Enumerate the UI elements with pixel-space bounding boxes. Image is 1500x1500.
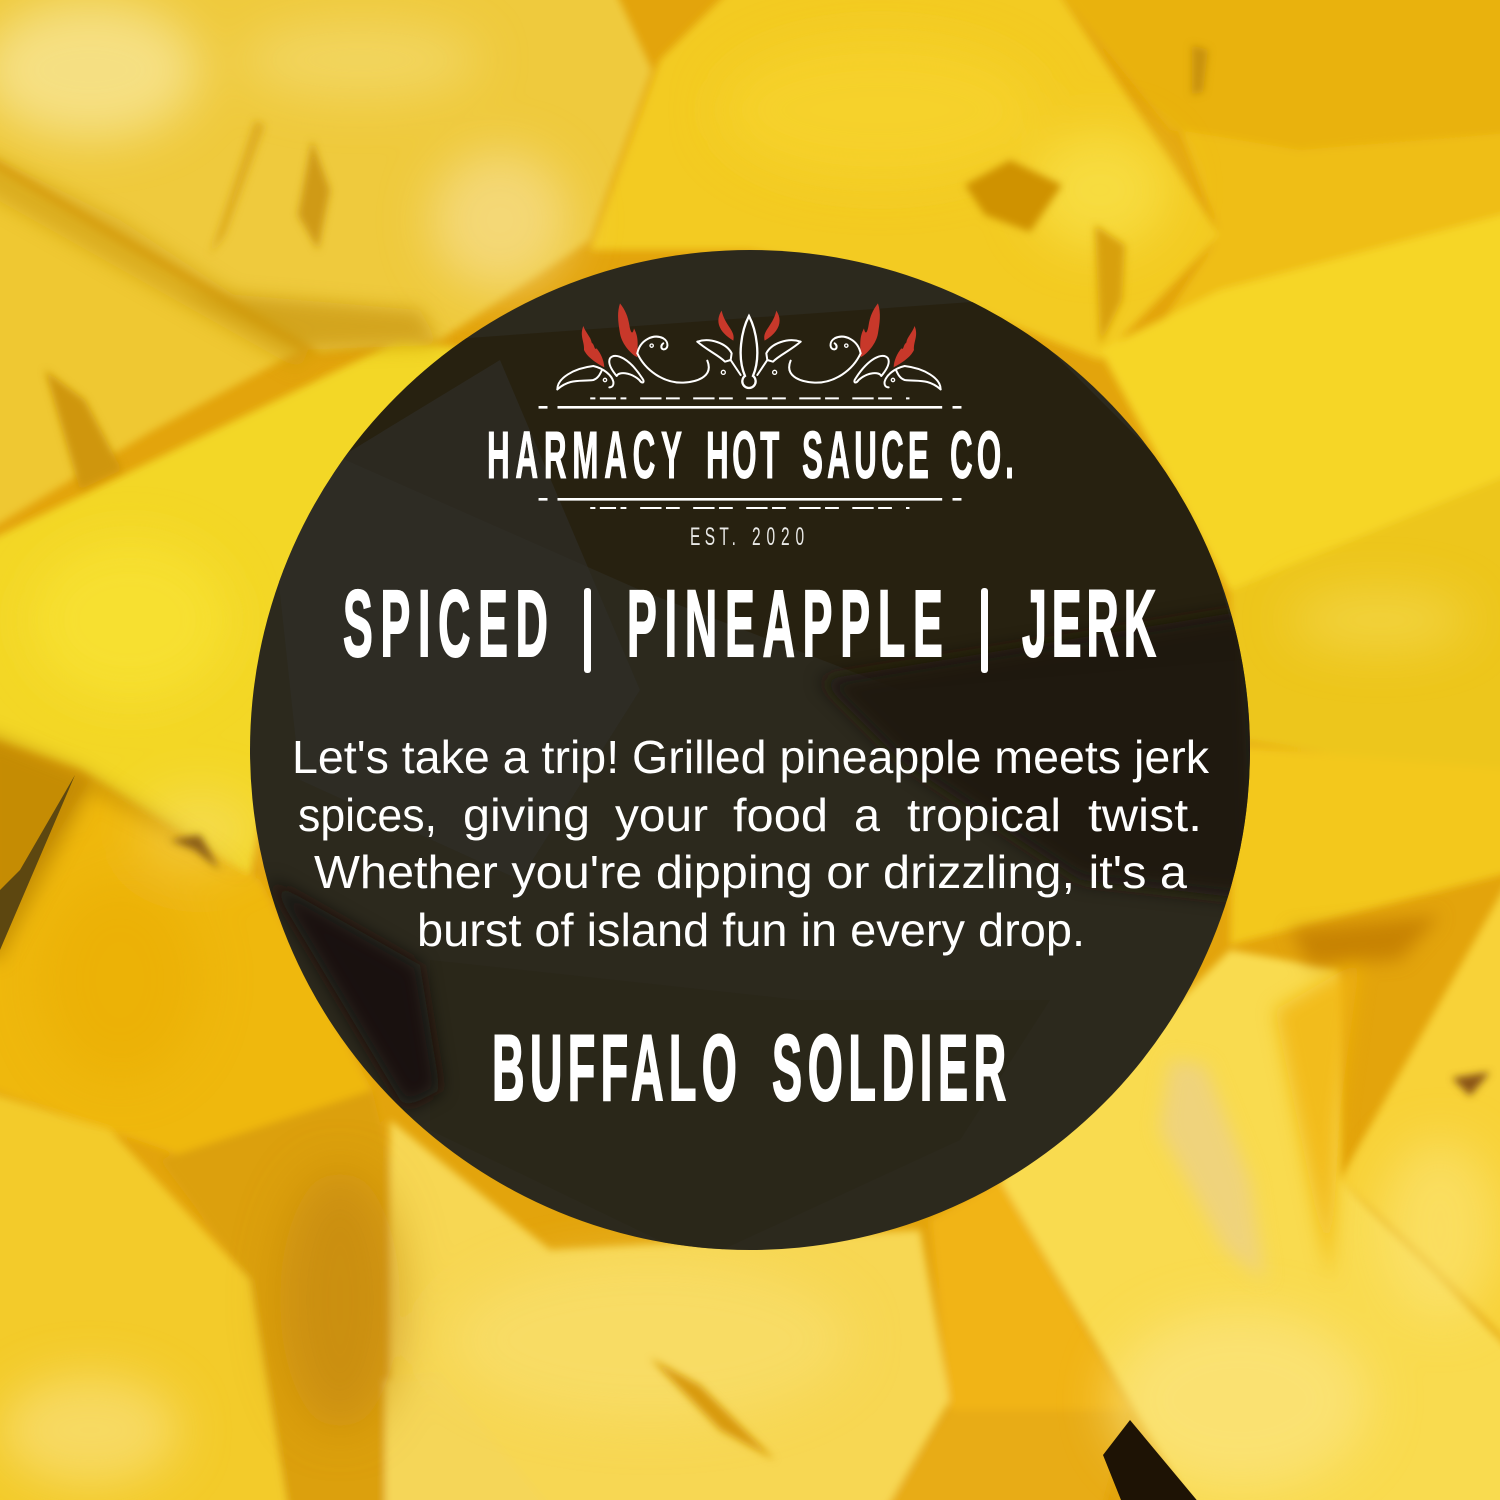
established year: 2020 [752,523,804,551]
product name: BUFFALO [492,1015,737,1120]
top rule [539,398,961,407]
wordmark: CO. [950,419,1014,493]
pale pineapple core and shadows [0,150,1440,1280]
description text: Let's take a trip! Grilled pineapple meets jerk [292,731,1210,783]
description text: tropical [907,789,1061,841]
wordmark: HARMACY [487,419,682,493]
description text: burst of island fun in every drop. [417,904,1085,956]
heading: flavour notes: JERK [1022,570,1156,676]
wordmark [487,419,1014,493]
description text: food [733,789,828,841]
icon: chili and scroll ornament [557,303,941,389]
established year: EST. [690,523,736,551]
bottom rule [539,499,961,508]
description text: your [615,789,708,841]
description text: a [854,789,880,841]
dark circle panel [250,250,1260,1260]
description text: spices, [298,789,437,841]
description text: Whether you're dipping or drizzling, it's a [314,846,1187,898]
description text: giving [463,789,590,841]
heading: flavour notes: PINEAPPLE [627,570,943,676]
description text: twist. [1088,789,1202,841]
logo: Harmacy Hot Sauce Co. [487,303,1014,551]
product name [492,1015,1006,1120]
product name: SOLDIER [772,1015,1006,1120]
heading: flavour notes: SPICED [343,570,548,676]
heading: flavour notes [343,570,1156,676]
wordmark: HOT [706,419,779,493]
established year [690,523,804,551]
wordmark: SAUCE [802,419,929,493]
